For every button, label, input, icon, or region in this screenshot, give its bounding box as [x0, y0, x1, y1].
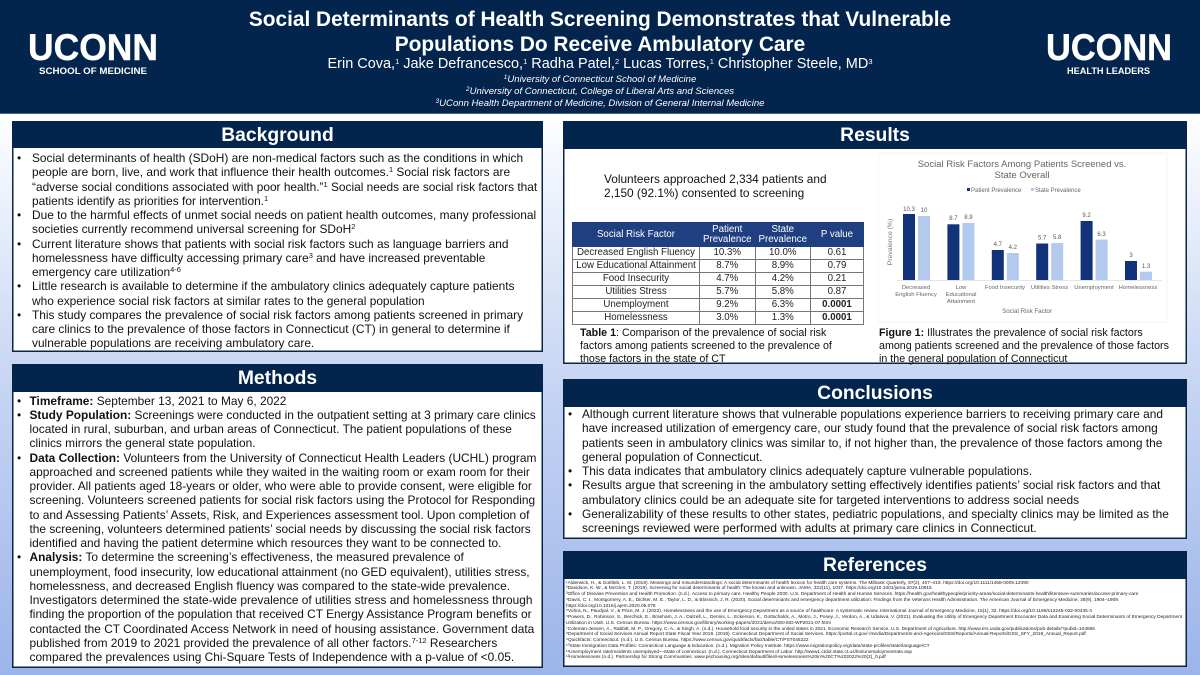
- background bullet list: emergency care utilization4-6: [32, 265, 181, 279]
- data labels: 4.2: [1009, 245, 1018, 251]
- table: social risk factors: Social Risk Factor: [597, 229, 675, 240]
- conclusions bullet list: This data indicates that ambulatory clinics adequately capture vulnerable populations.: [582, 464, 1032, 478]
- category labels: Unemployment: [1074, 285, 1114, 291]
- reference list: ²Davidson, K. W., & McGinn, T. (2019). Screening for social determinants of health: The known and unknown. JAMA, 322(11), 1037. https://doi.org/10.1001/jama.2019.10915: [566, 586, 932, 591]
- background bullet list: [17, 151, 538, 350]
- table: social risk factors: 0.61: [828, 247, 846, 258]
- methods bullet list: •: [17, 550, 21, 564]
- panel: references: [563, 551, 1187, 667]
- table: social risk factors: 0.0001: [822, 312, 852, 323]
- table: social risk factors: 8.7%: [716, 260, 738, 271]
- category labels: Educational: [946, 292, 976, 298]
- methods bullet list: Investigators determined the state-wide prevalence of utilities stress and homelessness through: [30, 593, 532, 607]
- table: social risk factors: Low Educational Attainment: [576, 260, 696, 271]
- table: social risk factors: Prevalence: [759, 234, 807, 245]
- figure caption: [879, 326, 1169, 364]
- table: social risk factors: Food Insecurity: [603, 273, 669, 284]
- table: social risk factors: 5.7%: [716, 286, 738, 297]
- table: social risk factors: 10.3%: [714, 247, 741, 258]
- category labels: Decreased: [902, 285, 930, 291]
- table: social risk factors: [572, 222, 864, 325]
- reference list: https://doi.org/10.1016/j.ajem.2020.05.078: [566, 604, 656, 609]
- category labels: Low: [956, 285, 967, 291]
- heading: references: References: [823, 555, 927, 576]
- panel: methods: [12, 364, 543, 668]
- table: social risk factors: 0.21: [828, 273, 846, 284]
- methods bullet list: unemployment, food insecurity, low educational attainment (no GED equivalent), utilities stress,: [30, 565, 530, 579]
- heading: conclusions: Conclusions: [817, 383, 933, 404]
- conclusions bullet list: •: [568, 407, 572, 421]
- chart title: [918, 159, 1126, 181]
- methods bullet list: Data Collection: Volunteers from the University of Connecticut Health Leaders (UCHL) program: [30, 451, 536, 465]
- background bullet list: who experience social risk factors at similar rates to the general population: [32, 294, 425, 308]
- background bullet list: Little research is available to determine if the ambulatory clinics adequately capture patients: [32, 279, 514, 293]
- panel: background: [12, 121, 543, 352]
- background bullet list: care clinics to the prevalence of those factors in Connecticut (CT) in general to determine if: [32, 322, 510, 336]
- background bullet list: •: [17, 151, 21, 165]
- methods bullet list: located in rural, suburban, and urban areas of Connecticut. The patient populations of these: [30, 422, 512, 436]
- y axis label: Prevalence (%): [887, 219, 894, 265]
- table caption: those factors in the state of CT: [580, 352, 726, 364]
- chart title: State Overall: [995, 170, 1049, 181]
- methods bullet list: •: [17, 451, 21, 465]
- affiliations: 2University of Connecticut, College of Liberal Arts and Sciences: [466, 86, 734, 97]
- table: social risk factors: Patient: [712, 224, 742, 234]
- affiliations: 1University of Connecticut School of Medicine: [504, 74, 696, 85]
- affiliations: [436, 74, 764, 109]
- heading: methods: [12, 364, 543, 392]
- data labels: 9.2: [1082, 213, 1091, 219]
- table: social risk factors: 0.0001: [822, 299, 852, 310]
- table: social risk factors: 4.7%: [716, 273, 738, 284]
- heading: results: [563, 121, 1187, 149]
- methods bullet list: [17, 394, 536, 664]
- heading: results: Results: [840, 125, 910, 146]
- table: social risk factors: 10.0%: [769, 247, 796, 258]
- logo: UConn Health Leaders: HEALTH LEADERS: [1067, 66, 1150, 76]
- table caption: Table 1: Comparison of the prevalence of social risk: [580, 326, 826, 338]
- conclusions bullet list: Although current literature shows that vulnerable populations experience barriers to receiving primary care and: [582, 407, 1163, 421]
- reference list: ⁹Quickfacts: Connecticut. (n.d.). U.S. Census Bureau. https://www.census.gov/quickfacts/fact/table/CT/PST045222: [566, 638, 809, 643]
- table: social risk factors: Prevalence: [703, 234, 751, 245]
- background bullet list: societies currently recommend universal screening for SDoH2: [32, 222, 355, 236]
- figure caption: Figure 1: Illustrates the prevalence of social risk factors: [879, 326, 1143, 338]
- table: social risk factors: Utilities Stress: [605, 286, 667, 297]
- reference list: ¹²Homelessness (n.d.). Partnership for Strong Communities. www.pschousing.org/sites/default/files/Homelessness%20in%20CT%202022%20(2)_0.pdf: [566, 655, 886, 660]
- heading: background: [12, 121, 543, 148]
- conclusions bullet list: patients seen in ambulatory clinics was similar to, if not higher than, the prevalence of those factors among the: [582, 436, 1162, 450]
- logo: UConn School of Medicine: UCONN: [28, 27, 158, 68]
- methods bullet list: Analysis: To determine the screening’s effectiveness, the measured prevalence of: [30, 550, 464, 564]
- state prevalence bars: [918, 216, 1152, 280]
- panel: conclusions: [563, 379, 1187, 539]
- conclusions bullet list: [568, 407, 1169, 535]
- methods bullet list: contacted the CT Coordinated Access Network in need of housing assistance. Government data: [30, 622, 534, 636]
- results summary text: 2,150 (92.1%) consented to screening: [604, 186, 804, 200]
- reference list: ⁸Department of Social Services Annual Report State Fiscal Year 2019. (2019). Connecticut Department of Social Services. https://portal.ct.gov/-/media/Departments-and-Agencies/DSS/Reports/Annual-Reports/DSS_SFY_2019_Annual_Report.pdf: [566, 632, 1086, 637]
- category labels: Homelessness: [1119, 285, 1157, 291]
- background bullet list: Due to the harmful effects of unmet social needs on patient health outcomes, many professional: [32, 208, 536, 222]
- table: social risk factors: 6.3%: [772, 299, 794, 310]
- bar chart: [878, 152, 1168, 322]
- table: social risk factors: 9.2%: [716, 299, 738, 310]
- table: social risk factors: P value: [821, 229, 853, 240]
- background bullet list: •: [17, 237, 21, 251]
- category labels: English Fluency: [895, 292, 937, 298]
- panel: results: [563, 121, 1187, 364]
- conclusions bullet list: screenings reviewed were performed with adults at primary care clinics in Connecticut.: [582, 521, 1037, 535]
- conclusions bullet list: general population of Connecticut.: [582, 450, 762, 464]
- background bullet list: Current literature shows that patients with social risk factors such as language barriers and: [32, 237, 509, 251]
- methods bullet list: to and Assessing Patients’ Assets, Risk, and Experiences assessment tool. Upon completion of: [30, 508, 529, 522]
- background bullet list: homelessness have difficulty accessing primary care3 and have increased preventable: [32, 251, 485, 265]
- background bullet list: •: [17, 208, 21, 222]
- data labels: [903, 207, 1151, 270]
- category labels: Utilities Stress: [1031, 285, 1068, 291]
- table: social risk factors: State: [771, 224, 794, 234]
- table caption: factors among patients screened to the prevalence of: [580, 340, 832, 352]
- background bullet list: Social determinants of health (SDoH) are non-medical factors such as the conditions in which: [32, 151, 523, 165]
- reference list: ¹Alderwick, H., & Gottlieb, L. M. (2019). Meanings and misunderstandings: A social determinants of health lexicon for health care systems. The Milbank Quarterly, 97(2), 407–419. https://doi.org/10.1111/1468-0009.12390: [566, 580, 1029, 586]
- reference list: ⁶Powers, D., Robinson, S., Berchick, E., Branham, J. A., Dalzell, L., Dennis, L., Eckerson, K., Gottschalck, A., Motro, J., Posey, J., Verdon, A., & Udalova, V. (2021). Evaluating the Utility of Emergency Department Encounter Data and Examining Social Determinants of Emergency Department: [566, 615, 1182, 620]
- authors: Erin Cova,1 Jake Defrancesco,1 Radha Patel,2 Lucas Torres,1 Christopher Steele, MD3: [328, 56, 872, 72]
- conclusions bullet list: Generalizability of these results to other states, pediatric populations, and specialty clinics may be limited as the: [582, 507, 1169, 521]
- reference list: ¹¹Unemployment rate/residents unemployed—State of connecticut. (n.d.). Connecticut Department of Labor. http://www1.ctdol.state.ct.us/lmi/unemploymentrate.asp: [566, 650, 912, 655]
- methods bullet list: screening. Volunteers screened patients for social risk factors using the Protocol for Responding: [30, 493, 535, 507]
- reference list: Utilization in Utah. U.S. Census Bureau. https://www.census.gov/library/working-papers/2021/demo/SEHSD-WP2021-07.html: [566, 621, 831, 626]
- methods bullet list: clinics mirrors the general state population.: [30, 436, 256, 450]
- background bullet list: “adverse social conditions associated with poor health.”1 Social needs are social risk factors that: [32, 180, 537, 194]
- table: social risk factors: Unemployment: [603, 299, 669, 310]
- table: social risk factors: 5.8%: [772, 286, 794, 297]
- category labels: [895, 285, 1157, 305]
- methods bullet list: Study Population: Screenings were conducted in the outpatient setting at 3 primary care clinics: [30, 408, 536, 422]
- category labels: Food Insecurity: [985, 285, 1025, 291]
- methods bullet list: finding the proportion of the population that received CT Energy Assistance Program benefits or: [30, 607, 532, 621]
- data labels: 5.8: [1053, 235, 1062, 241]
- reference list: ¹⁰State Immigration Data Profiles: Connecticut Language & Education. (n.d.). Migration Policy Institute. https://www.migrationpolicy.org/data/state-profiles/state/language/CT: [566, 644, 930, 649]
- results summary text: Volunteers approached 2,334 patients and: [604, 172, 827, 186]
- methods bullet list: Timeframe: September 13, 2021 to May 6, 2022: [30, 394, 286, 408]
- reference list: ⁷Coleman-Jensen, A., Rabbitt, M. P., Gregory, C. A., & Singh, A. (n.d.). Household food security in the united states in 2021. Economic Research Service, U.S. Department of Agriculture. http://www.ers.usda.gov/publications/pub-details/?pubid=104655: [566, 627, 1095, 632]
- heading: conclusions: [563, 379, 1187, 407]
- conclusions bullet list: Results argue that screening in the ambulatory setting effectively identifies patients’ social risk factors and that: [582, 478, 1160, 492]
- conclusions bullet list: have increased utilization of emergency care, our study found that the prevalence of social risk factors among: [582, 421, 1158, 435]
- background bullet list: •: [17, 279, 21, 293]
- data labels: 5.7: [1038, 236, 1047, 242]
- affiliations: 3UConn Health Department of Medicine, Division of General Internal Medicine: [436, 98, 764, 109]
- table caption: [580, 326, 832, 364]
- methods bullet list: •: [17, 408, 21, 422]
- table: social risk factors: Homelessness: [604, 312, 668, 323]
- table: social risk factors: 3.0%: [716, 312, 738, 323]
- methods bullet list: published from 2019 to 2021 provided the prevalence of all other factors.7-12 Researchers: [30, 636, 497, 650]
- data labels: 4.7: [994, 242, 1003, 248]
- reference list: ⁵Vohra, N., Paudyal, V., & Price, M. J. (2022). Homelessness and the use of Emergency Department as a source of healthcare: A systematic review. International Journal of Emergency Medicine, 15(1), 32. https://doi.org/10.1186/s12245-022-00435-3: [566, 609, 1092, 614]
- conclusions bullet list: •: [568, 464, 572, 478]
- logo: UConn School of Medicine: SCHOOL OF MEDICINE: [39, 66, 147, 76]
- heading: methods: Methods: [238, 368, 317, 389]
- figure caption: in the general population of Connecticut: [879, 352, 1067, 364]
- methods bullet list: approached and screened patients while they waited in the waiting room or exam room for their: [30, 465, 530, 479]
- background bullet list: patients identify as priorities for intervention.1: [32, 194, 268, 208]
- logo: UConn Health Leaders: UCONN: [1046, 27, 1172, 68]
- patient prevalence bars: [903, 214, 1137, 280]
- table: social risk factors: Decreased English Fluency: [577, 247, 695, 258]
- conclusions bullet list: ambulatory clinics could be an adequate site for targeted interventions to address social needs: [582, 493, 1079, 507]
- background bullet list: •: [17, 308, 21, 322]
- conclusions bullet list: •: [568, 507, 572, 521]
- data labels: 3: [1129, 253, 1133, 259]
- data labels: 10: [921, 208, 928, 214]
- x axis label: Social Risk Factor: [1002, 308, 1052, 315]
- background bullet list: This study compares the prevalence of social risk factors among patients screened in primary: [32, 308, 523, 322]
- heading: background: Background: [221, 125, 334, 146]
- data labels: 8.7: [949, 216, 958, 222]
- heading: references: [563, 551, 1187, 579]
- reference list: ³Office of Disease Prevention and Health Promotion. (n.d.). Access to primary care. Healthy People 2030. U.S. Department of Health and Human Services. https://health.gov/healthypeople/priority-areas/social-determinants-health/literature-summaries/access-primary-care: [566, 592, 1138, 597]
- reference list: [566, 580, 1182, 660]
- chart legend: [967, 188, 1081, 194]
- data labels: 10.3: [903, 207, 915, 213]
- data labels: 8.9: [964, 215, 973, 221]
- table: social risk factors: 4.2%: [772, 273, 794, 284]
- data labels: 1.3: [1142, 264, 1151, 270]
- data labels: 6.3: [1097, 232, 1106, 238]
- methods bullet list: the screening, volunteers determined patients’ social needs by discussing the social risk factors: [30, 522, 531, 536]
- methods bullet list: provider. All patients aged 18-years or older, who were able to provide consent, were eligible for: [30, 479, 532, 493]
- table: social risk factors: 8.9%: [772, 260, 794, 271]
- table: social risk factors: 0.87: [828, 286, 846, 297]
- methods bullet list: •: [17, 394, 21, 408]
- figure caption: among patients screened and the prevalence of those factors: [879, 340, 1169, 352]
- results summary text: [604, 172, 827, 200]
- category labels: Attainment: [947, 299, 975, 305]
- chart legend: Patient Prevalence: [971, 188, 1022, 194]
- header banner: [0, 0, 1200, 114]
- title: Populations Do Receive Ambulatory Care: [395, 33, 805, 56]
- table: social risk factors: 0.79: [828, 260, 846, 271]
- methods bullet list: homelessness, and decreased English fluency was compared to the state-wide prevalence.: [30, 579, 510, 593]
- table: social risk factors: 1.3%: [772, 312, 794, 323]
- conclusions bullet list: •: [568, 478, 572, 492]
- reference list: ⁴Davis, C. I., Montgomery, A. E., Dichter, M. E., Taylor, L. D., & Blosnich, J. R. (2020). Social determinants and emergency department utilization: Findings from the Veterans Health Administration. The American Journal of Emergency Medicine, 38(9), 1904–1909.: [566, 598, 1119, 603]
- title: [249, 8, 951, 56]
- chart title: Social Risk Factors Among Patients Screened vs.: [918, 159, 1126, 170]
- methods bullet list: identified and having the patient determine which resources they want to be connected to.: [30, 536, 501, 550]
- methods bullet list: compared the prevalences using Chi-Square Tests of Independence with a p-value of <0.05.: [30, 650, 514, 664]
- chart legend: State Prevalence: [1035, 188, 1081, 194]
- background bullet list: people are born, live, and work that influence their health outcomes.1 Social risk factors are: [32, 165, 510, 179]
- title: Social Determinants of Health Screening Demonstrates that Vulnerable: [249, 8, 951, 31]
- background bullet list: vulnerable populations are receiving ambulatory care.: [32, 336, 314, 350]
